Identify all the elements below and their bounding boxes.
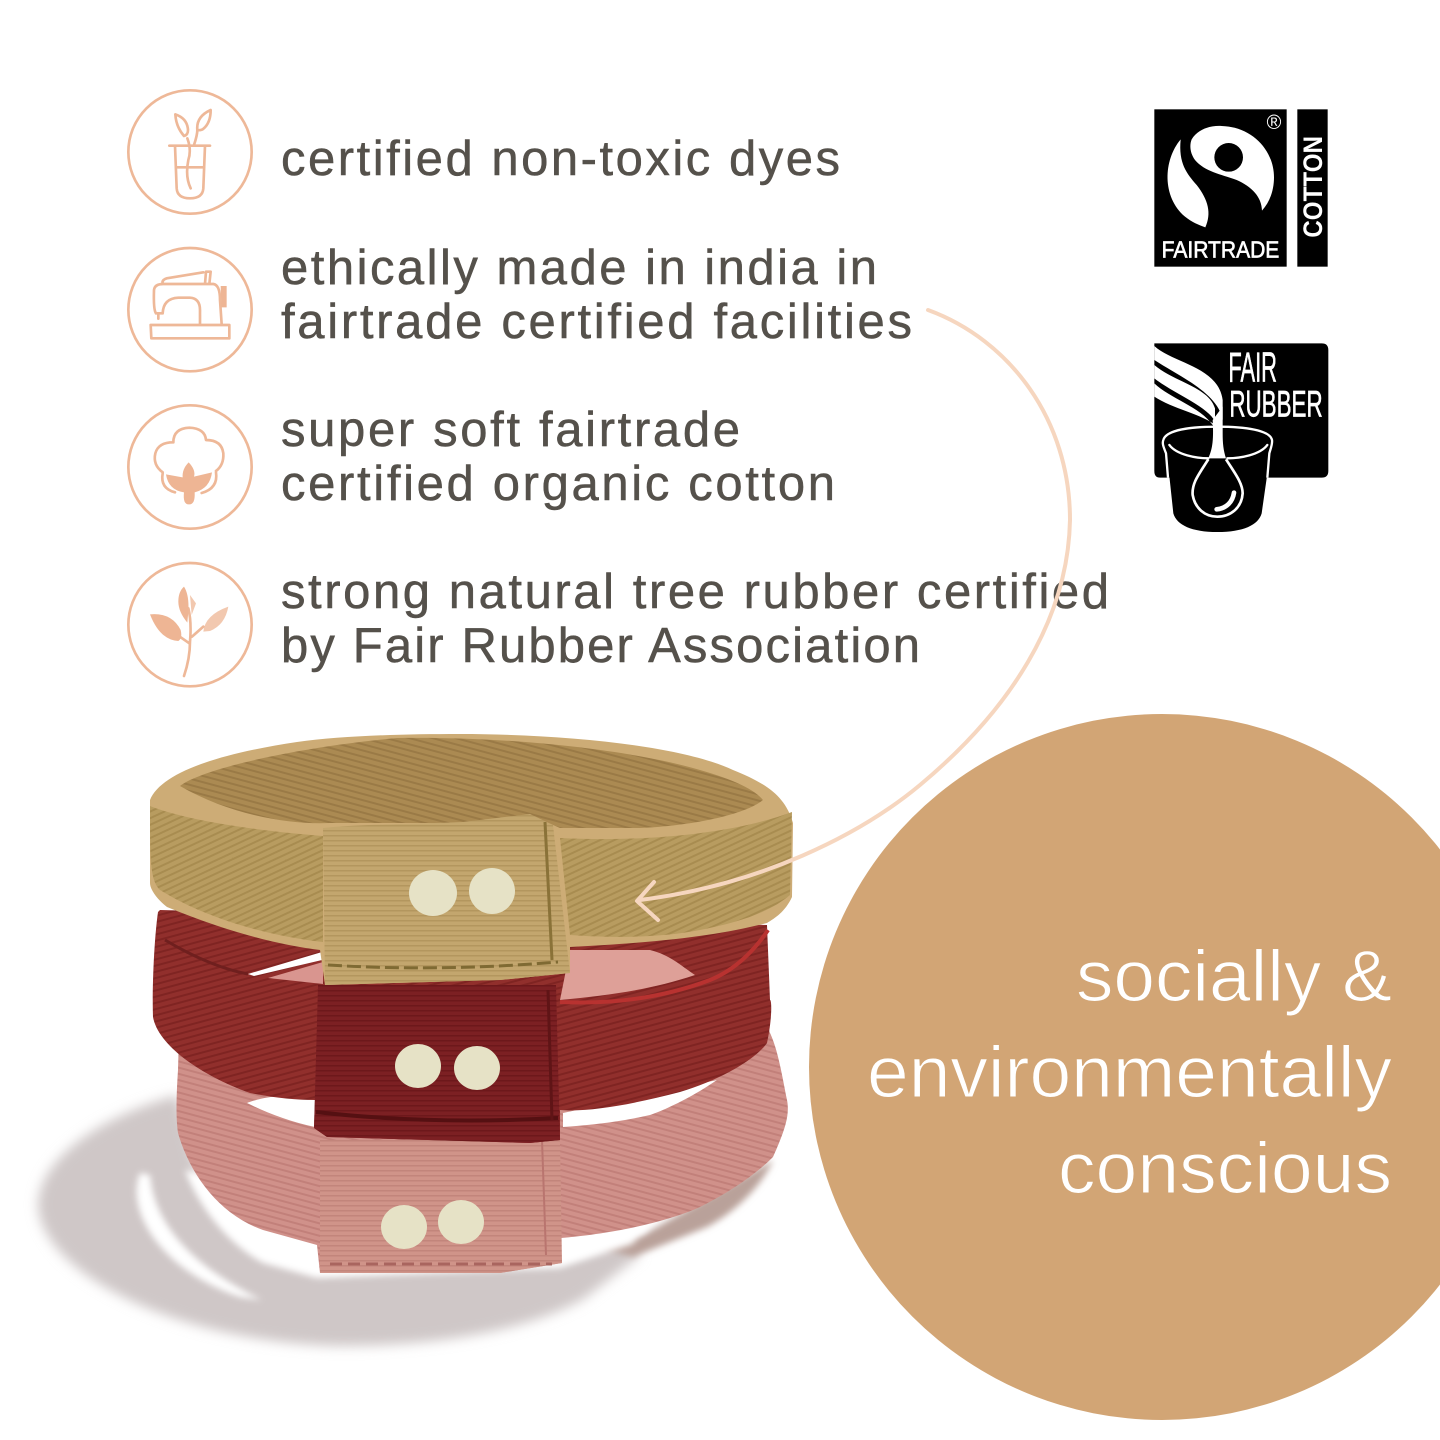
- icon: cotton boll: [128, 405, 252, 529]
- callout text: socially &: [1076, 937, 1392, 1017]
- benefit: natural rubber: [128, 563, 1109, 686]
- benefit: non-toxic dyes: [128, 90, 840, 214]
- text: by Fair Rubber Association: by Fair Rubber Association: [281, 619, 920, 673]
- icon: plant in beaker: [128, 90, 252, 214]
- text: fairtrade facilities: fairtrade certified facilities: [281, 295, 912, 349]
- logo: Fair Rubber: RUBBER: [1229, 383, 1323, 425]
- arrow: from fairtrade text to band: [637, 310, 1070, 920]
- logo: Fairtrade cotton: COTTON: [1298, 136, 1328, 238]
- icon: rubber tree sprig: [128, 563, 252, 686]
- band: gold: [150, 734, 793, 985]
- callout circle: [809, 714, 1440, 1420]
- text: strong natural tree rubber: strong natural tree rubber certified: [281, 565, 1109, 619]
- text: certified non-toxic dyes: certified non-toxic dyes: [281, 132, 840, 186]
- callout text: conscious: [1058, 1129, 1392, 1209]
- icon: sewing machine: [128, 248, 252, 371]
- text: super soft fairtrade: super soft fairtrade: [281, 403, 740, 457]
- text: certified organic cotton: certified organic cotton: [281, 457, 835, 511]
- benefit: ethically made: [128, 241, 912, 371]
- benefit: organic cotton: [128, 403, 835, 529]
- logo: Fair Rubber: [1154, 343, 1328, 532]
- logo: Fairtrade cotton: ®: [1267, 112, 1282, 134]
- logo: Fairtrade cotton: FAIRTRADE: [1162, 236, 1279, 262]
- callout text: environmentally: [867, 1033, 1392, 1113]
- logo: Fairtrade cotton: [1154, 109, 1328, 267]
- panel: benefits list: [128, 90, 1109, 686]
- callout text: [867, 937, 1392, 1209]
- text: ethically made in india: ethically made in india in: [281, 241, 877, 295]
- band: red: [153, 910, 771, 1143]
- logo: Fair Rubber: FAIR: [1228, 345, 1277, 391]
- cast shadow: [38, 1095, 773, 1346]
- photo: stack of three hair ties: [38, 734, 793, 1346]
- band: pink: [176, 1000, 788, 1273]
